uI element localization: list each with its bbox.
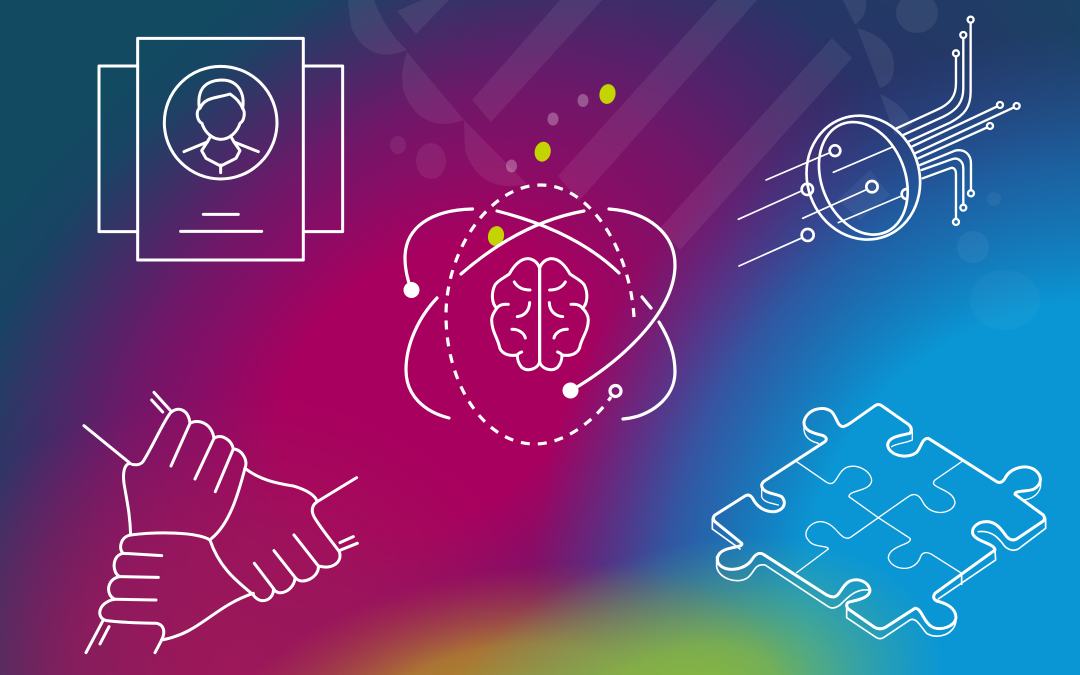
circuit traces [897, 17, 1020, 225]
icon: profile card [99, 38, 343, 260]
icon: atom with brain [404, 185, 675, 444]
icon: digital circuit portal [738, 17, 1020, 266]
icon: brain [492, 259, 588, 370]
puzzle top surface [713, 404, 1044, 629]
motion streaks [738, 145, 907, 266]
lens ring [789, 100, 937, 256]
icon: three joined hands [84, 392, 357, 653]
side pages [99, 66, 343, 232]
puzzle seams [797, 462, 962, 573]
puzzle side edges [804, 423, 818, 443]
right hand [210, 468, 357, 601]
icon: jigsaw puzzle [712, 404, 1046, 639]
front page [138, 38, 303, 260]
DNA helix watermark [348, 0, 1040, 330]
bottom hand [86, 533, 253, 653]
top hand [84, 392, 246, 538]
floating particles [486, 83, 617, 247]
portrait [164, 66, 277, 231]
